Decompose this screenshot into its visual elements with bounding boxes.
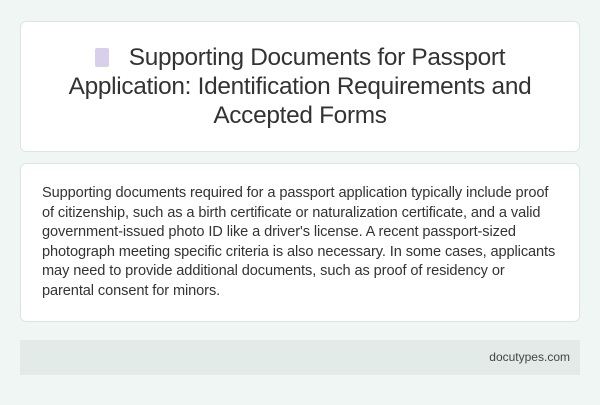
title: Accepted Forms — [213, 102, 387, 129]
text block: government-issued photo ID like a driver's license. A recent passport-sized — [42, 224, 516, 240]
panel: header — [20, 21, 580, 152]
title: Supporting Documents for Passport — [129, 44, 505, 71]
footer — [20, 340, 580, 375]
text block — [42, 185, 555, 298]
panel: description — [20, 163, 580, 322]
icon: document — [95, 48, 109, 67]
text block: may need to provide additional documents, such as proof of residency or — [42, 263, 505, 279]
text block: photograph meeting specific criteria is also necessary. In some cases, applicants — [42, 244, 555, 260]
title — [68, 44, 531, 129]
footer text: docutypes.com — [489, 350, 570, 364]
text block: parental consent for minors. — [42, 282, 220, 298]
text block: Supporting documents required for a passport application typically include proof — [42, 185, 548, 201]
text block: of citizenship, such as a birth certificate or naturalization certificate, and a valid — [42, 204, 540, 220]
title: Application: Identification Requirements and — [69, 73, 531, 100]
